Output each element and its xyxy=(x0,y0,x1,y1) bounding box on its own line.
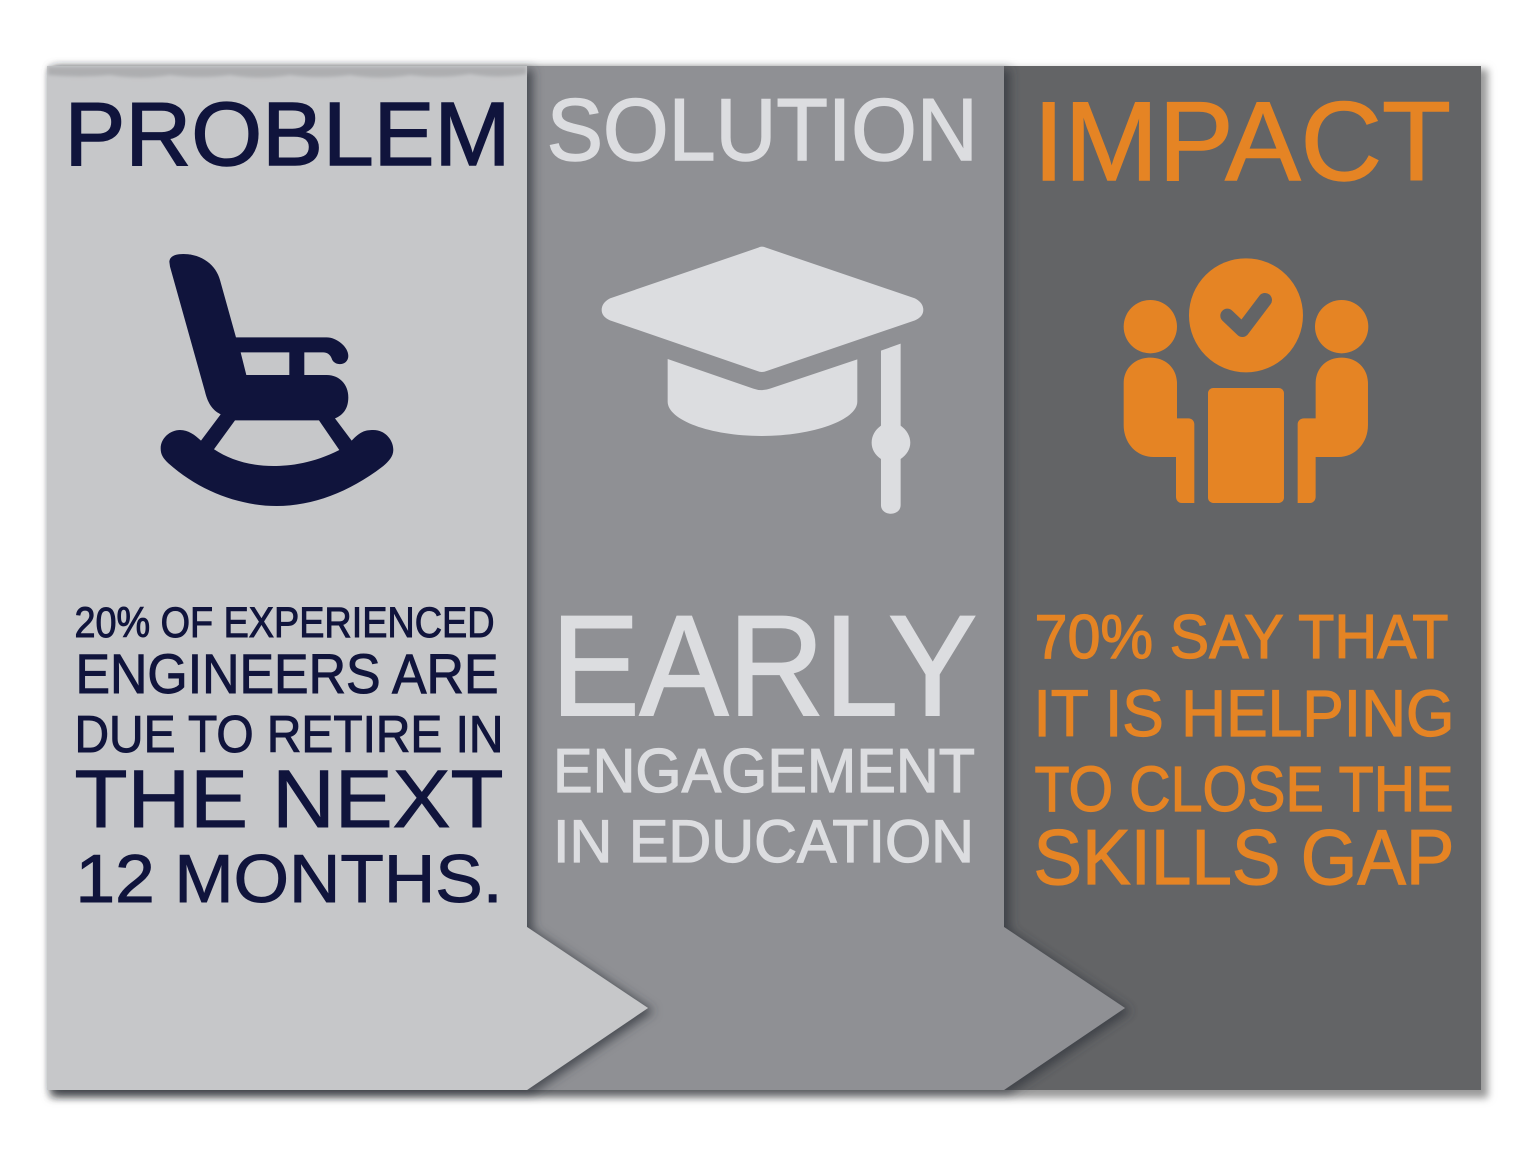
icon: rocking chair xyxy=(161,254,393,506)
solution text: ENGAGEMENT xyxy=(553,737,975,806)
heading: solution: SOLUTION xyxy=(547,80,978,179)
top edge band xyxy=(48,67,526,78)
solution text: IN EDUCATION xyxy=(553,808,974,875)
impact text: TO CLOSE THE xyxy=(1034,753,1454,825)
icon: graduation cap xyxy=(602,247,923,514)
solution text: EARLY xyxy=(551,587,977,746)
problem text: ENGINEERS ARE xyxy=(76,642,498,705)
solution text xyxy=(551,587,977,875)
problem text xyxy=(74,599,504,917)
problem text: DUE TO RETIRE IN xyxy=(74,706,504,764)
panel: problem xyxy=(47,66,648,1090)
problem text: 12 MONTHS. xyxy=(76,841,502,917)
impact text: IT IS HELPING xyxy=(1034,676,1454,750)
icon: people around table with check xyxy=(1124,258,1368,503)
impact text xyxy=(1034,603,1454,901)
heading: impact: IMPACT xyxy=(1033,79,1451,204)
impact text: 70% SAY THAT xyxy=(1034,603,1448,672)
panel: solution xyxy=(47,66,1125,1090)
problem text: THE NEXT xyxy=(74,754,504,845)
impact text: SKILLS GAP xyxy=(1034,813,1454,901)
problem text: 20% OF EXPERIENCED xyxy=(74,599,494,647)
heading: problem: PROBLEM xyxy=(64,85,510,185)
